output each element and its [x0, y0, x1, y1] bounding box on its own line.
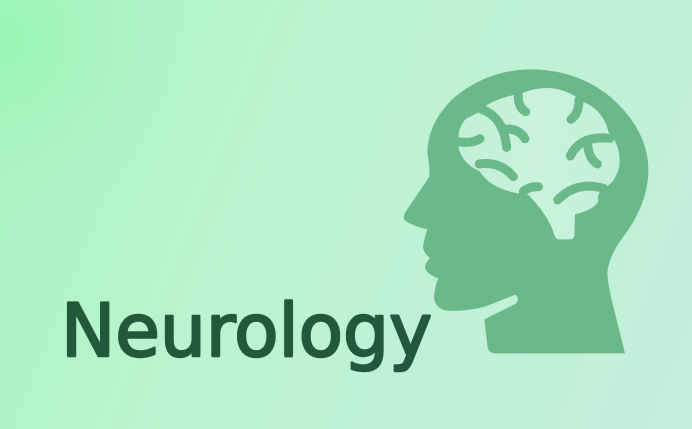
head silhouette	[404, 69, 648, 353]
brain	[458, 88, 620, 239]
icon: head silhouette with brain	[404, 69, 648, 353]
title: Neurology	[61, 289, 432, 374]
brain grooves	[458, 95, 610, 200]
